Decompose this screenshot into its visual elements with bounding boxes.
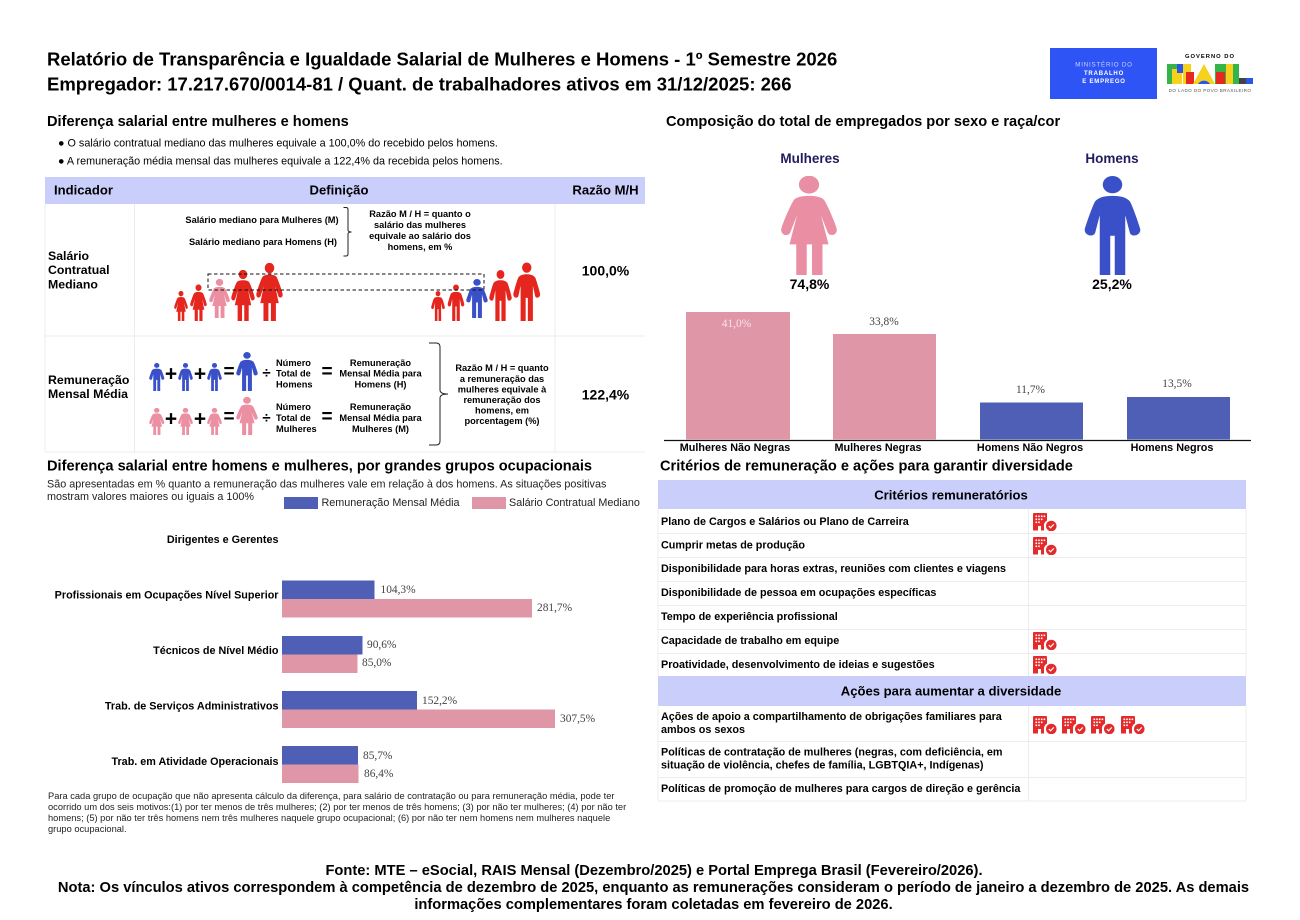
text: razão remuneração: porcentagem (%) bbox=[464, 416, 540, 426]
definition labels: salário mediano: Salário mediano para Mulheres (M) bbox=[185, 215, 339, 225]
formula: homens: Homens bbox=[276, 380, 312, 390]
logo: Governo do Brasil: DO LADO DO POVO BRASILEIRO bbox=[1169, 88, 1251, 93]
panel: ações para diversidade bbox=[658, 676, 1246, 801]
title: Relatório de Transparência e Igualdade Salarial de Mulheres e Homens - 1º Semestre 2026 bbox=[47, 48, 837, 70]
header: critérios remuneratórios: Critérios remuneratórios bbox=[874, 488, 1028, 502]
value: 25,2%: 25,2% bbox=[1092, 276, 1132, 292]
formula: mulheres: Mulheres bbox=[276, 424, 317, 434]
heading: composição: Composição do total de empregados por sexo e raça/cor bbox=[666, 114, 1060, 130]
value: 74,8%: 74,8% bbox=[790, 276, 830, 292]
heading: critérios: Critérios de remuneração e ações para garantir diversidade bbox=[660, 458, 1073, 474]
bar chart: grupos ocupacionais: 307,5% bbox=[560, 713, 596, 725]
bar chart: sexo e raça/cor: Homens Não Negros bbox=[977, 442, 1083, 454]
bar chart: grupos ocupacionais: 104,3% bbox=[380, 584, 416, 596]
text: razão remuneração: remuneração dos bbox=[463, 395, 541, 405]
row texts: Políticas de contratação de mulheres (negras, com deficiência, em bbox=[661, 746, 1002, 758]
logo: Governo do Brasil bbox=[1167, 54, 1253, 93]
bar chart: sexo e raça/cor bbox=[664, 312, 1251, 454]
dashed box: medianos bbox=[208, 274, 484, 290]
bar chart: grupos ocupacionais: Técnicos de Nível Médio bbox=[153, 645, 279, 657]
text block: bullets: ● O salário contratual mediano das mulheres equivale a 100,0% do recebido pelos homens. bbox=[58, 138, 498, 150]
bar chart: grupos ocupacionais: 85,7% bbox=[363, 750, 393, 762]
text: razão remuneração: Razão M / H = quanto bbox=[455, 363, 549, 373]
bar chart: grupos ocupacionais: Profissionais em Ocupações Nível Superior bbox=[55, 590, 279, 602]
formula: homens: + bbox=[194, 362, 206, 386]
text: razão salário: salário das mulheres bbox=[374, 220, 466, 230]
table header: Razão M/H bbox=[572, 182, 639, 198]
footer: fonte e nota bbox=[58, 863, 1249, 913]
row label: Remuneração Mensal Média: Mensal Média bbox=[48, 387, 128, 401]
value: 122,4%: 122,4% bbox=[582, 386, 630, 402]
formula: mulheres: ÷ bbox=[262, 410, 271, 426]
formula: homens: + bbox=[165, 362, 177, 386]
formula: mulheres: = bbox=[223, 406, 235, 428]
text: razão salário: equivale ao salário dos bbox=[369, 231, 471, 241]
formula: mulheres bbox=[149, 397, 422, 435]
heading: grupos ocupacionais: Diferença salarial entre homens e mulheres, por grandes grupos ocupacionais bbox=[47, 458, 592, 474]
brace: remuneração bbox=[429, 343, 448, 445]
text block: nota do gráfico bbox=[48, 791, 626, 834]
icon: mulher bbox=[781, 176, 837, 275]
row texts bbox=[661, 711, 1021, 795]
text: razão salário bbox=[369, 209, 471, 252]
bar chart: grupos ocupacionais: 281,7% bbox=[537, 602, 573, 614]
text: razão remuneração: mulheres equivale à bbox=[458, 384, 547, 394]
bar chart: grupos ocupacionais: Dirigentes e Gerentes bbox=[167, 534, 278, 546]
logo: Ministério do Trabalho e Emprego bbox=[1050, 48, 1157, 99]
formula: homens: ÷ bbox=[262, 364, 271, 382]
text block: descrição do gráfico: mostram valores maiores ou iguais a 100% bbox=[47, 491, 254, 503]
table header: Definição bbox=[310, 182, 368, 198]
legend: Remuneração Mensal Média bbox=[322, 497, 460, 509]
header: ações: Ações para aumentar a diversidade bbox=[841, 684, 1061, 698]
header: ações bbox=[658, 676, 1246, 706]
label: Mulheres: Mulheres bbox=[780, 151, 840, 166]
logo: Ministério do Trabalho e Emprego: E EMPREGO bbox=[1082, 79, 1126, 85]
footer: fonte e nota: Nota: Os vínculos ativos correspondem à competência de dezembro de 2025, enquanto as remunerações consideram o período de janeiro a dezembro de 2025. As demais bbox=[58, 880, 1249, 896]
row texts: ambos os sexos bbox=[661, 724, 745, 736]
panel: tabela de indicadores bbox=[45, 177, 645, 452]
row texts: Ações de apoio a compartilhamento de obrigações familiares para bbox=[661, 711, 1003, 723]
formula: mulheres: Total de bbox=[276, 413, 311, 423]
label: Homens: Homens bbox=[1085, 151, 1139, 166]
row label: Salário Contratual Mediano: Contratual bbox=[48, 263, 110, 277]
bar chart: grupos ocupacionais bbox=[55, 534, 596, 783]
row texts: Políticas de promoção de mulheres para cargos de direção e gerência bbox=[661, 783, 1021, 795]
formula: mulheres: Mensal Média para bbox=[339, 413, 422, 423]
title bbox=[47, 48, 837, 94]
panel: composição por sexo bbox=[780, 151, 1140, 292]
icons: ações adotadas bbox=[1033, 716, 1145, 734]
bar chart: grupos ocupacionais: 85,0% bbox=[362, 657, 392, 669]
text block: nota do gráfico: homens; (5) por não ter três homens nem três mulheres naquele grupo ocupacional; (6) por não ter nem homens nem mulheres naquele bbox=[48, 813, 610, 823]
formula: homens: = bbox=[223, 362, 235, 382]
bar chart: sexo e raça/cor: 33,8% bbox=[869, 316, 899, 328]
text block: bullets bbox=[58, 138, 503, 168]
footer: fonte e nota: informações complementares foram coletadas em fevereiro de 2026. bbox=[414, 897, 893, 913]
bar chart: sexo e raça/cor: 13,5% bbox=[1162, 378, 1192, 390]
value: 100,0%: 100,0% bbox=[582, 262, 630, 278]
formula: mulheres: Mulheres (M) bbox=[352, 424, 409, 434]
formula: mulheres: + bbox=[194, 408, 206, 430]
table header bbox=[45, 177, 645, 204]
row texts bbox=[661, 516, 1006, 671]
text block: descrição do gráfico bbox=[47, 478, 607, 503]
row texts: Capacidade de trabalho em equipe bbox=[661, 635, 839, 647]
logo: Ministério do Trabalho e Emprego: TRABALHO bbox=[1084, 71, 1124, 77]
text: razão salário: homens, em % bbox=[388, 242, 452, 252]
row label: Salário Contratual Mediano: Mediano bbox=[48, 278, 98, 292]
formula: homens: Mensal Média para bbox=[339, 368, 422, 378]
bar chart: sexo e raça/cor: Mulheres Negras bbox=[834, 442, 922, 454]
text block: descrição do gráfico: São apresentadas em % quanto a remuneração das mulheres vale em relação à dos homens. As situações positivas bbox=[47, 478, 607, 490]
bar chart: grupos ocupacionais: 152,2% bbox=[422, 695, 458, 707]
row texts: Tempo de experiência profissional bbox=[661, 611, 838, 623]
bar chart: grupos ocupacionais: 86,4% bbox=[364, 768, 394, 780]
row label: Remuneração Mensal Média: Remuneração bbox=[48, 373, 130, 387]
logo: Governo do Brasil: GOVERNO DO bbox=[1185, 54, 1235, 60]
formula: homens: Remuneração bbox=[350, 358, 411, 368]
text: razão salário: Razão M / H = quanto o bbox=[369, 209, 471, 219]
text: razão remuneração bbox=[455, 363, 549, 426]
formula: mulheres: Número bbox=[276, 402, 311, 412]
text block: nota do gráfico: grupo ocupacional. bbox=[48, 824, 127, 834]
panel: critérios remuneratórios bbox=[658, 480, 1246, 676]
bar chart: grupos ocupacionais: Trab. de Serviços Administrativos bbox=[105, 700, 278, 712]
row label: Salário Contratual Mediano: Salário bbox=[48, 249, 89, 263]
brace: salário mediano bbox=[344, 208, 352, 256]
formula: mulheres: = bbox=[321, 406, 333, 428]
formula: mulheres: + bbox=[165, 408, 177, 430]
formula: homens bbox=[149, 352, 422, 391]
row texts: situação de violência, chefes de família, LGBTQIA+, Indígenas) bbox=[661, 760, 984, 772]
legend: Salário Contratual Mediano bbox=[509, 497, 640, 509]
text block: nota do gráfico: Para cada grupo de ocupação que não apresenta cálculo da diferença, para salário de contratação ou para remuneração média, pode ter bbox=[48, 791, 614, 801]
title: Empregador: 17.217.670/0014-81 / Quant. de trabalhadores ativos em 31/12/2025: 266 bbox=[47, 74, 792, 94]
row texts: Plano de Cargos e Salários ou Plano de Carreira bbox=[661, 516, 910, 528]
bar chart: sexo e raça/cor: 11,7% bbox=[1016, 384, 1046, 396]
row texts: Disponibilidade para horas extras, reuniões com clientes e viagens bbox=[661, 563, 1006, 575]
bar chart: sexo e raça/cor: 41,0% bbox=[722, 318, 752, 330]
row label: Remuneração Mensal Média bbox=[48, 373, 130, 401]
row texts: Proatividade, desenvolvimento de ideias e sugestões bbox=[661, 659, 935, 671]
icon: homem bbox=[1085, 176, 1140, 275]
icons: mulheres em ordem bbox=[174, 263, 283, 321]
bar chart: sexo e raça/cor: Mulheres Não Negras bbox=[680, 442, 790, 454]
formula: homens: Total de bbox=[276, 368, 311, 378]
heading: diferença salarial: Diferença salarial entre mulheres e homens bbox=[47, 114, 349, 130]
row texts: Disponibilidade de pessoa em ocupações específicas bbox=[661, 587, 936, 599]
header: critérios remuneratórios bbox=[658, 480, 1246, 509]
legend bbox=[284, 497, 640, 509]
definition labels: salário mediano bbox=[185, 215, 339, 247]
icons: empresa adota critério bbox=[1033, 513, 1057, 674]
text block: bullets: ● A remuneração média mensal das mulheres equivale a 122,4% da recebida pelos homens. bbox=[58, 156, 503, 168]
bar chart: grupos ocupacionais: 90,6% bbox=[367, 639, 397, 651]
formula: homens: = bbox=[321, 362, 333, 382]
row label: Salário Contratual Mediano bbox=[48, 249, 110, 292]
row texts: Cumprir metas de produção bbox=[661, 540, 805, 552]
text block: nota do gráfico: ocorrido um dos seis motivos:(1) por ter menos de três mulheres; (2) por ter menos de três homens; (3) por não ter mulheres; (4) por não ter bbox=[48, 802, 626, 812]
formula: homens: Homens (H) bbox=[355, 380, 406, 390]
table header: Indicador bbox=[54, 182, 113, 198]
text: razão remuneração: a remuneração das bbox=[460, 374, 544, 384]
formula: homens: Número bbox=[276, 358, 311, 368]
definition labels: salário mediano: Salário mediano para Homens (H) bbox=[189, 237, 337, 247]
icons: homens em ordem bbox=[431, 262, 540, 321]
text: razão remuneração: homens, em bbox=[475, 406, 529, 416]
bar chart: grupos ocupacionais: Trab. em Atividade Operacionais bbox=[111, 756, 278, 768]
formula: mulheres: Remuneração bbox=[350, 402, 411, 412]
footer: fonte e nota: Fonte: MTE – eSocial, RAIS Mensal (Dezembro/2025) e Portal Emprega Brasil (Fevereiro/2026). bbox=[325, 863, 983, 879]
logo: Ministério do Trabalho e Emprego: MINISTÉRIO DO bbox=[1075, 62, 1133, 68]
bar chart: sexo e raça/cor: Homens Negros bbox=[1131, 442, 1213, 454]
